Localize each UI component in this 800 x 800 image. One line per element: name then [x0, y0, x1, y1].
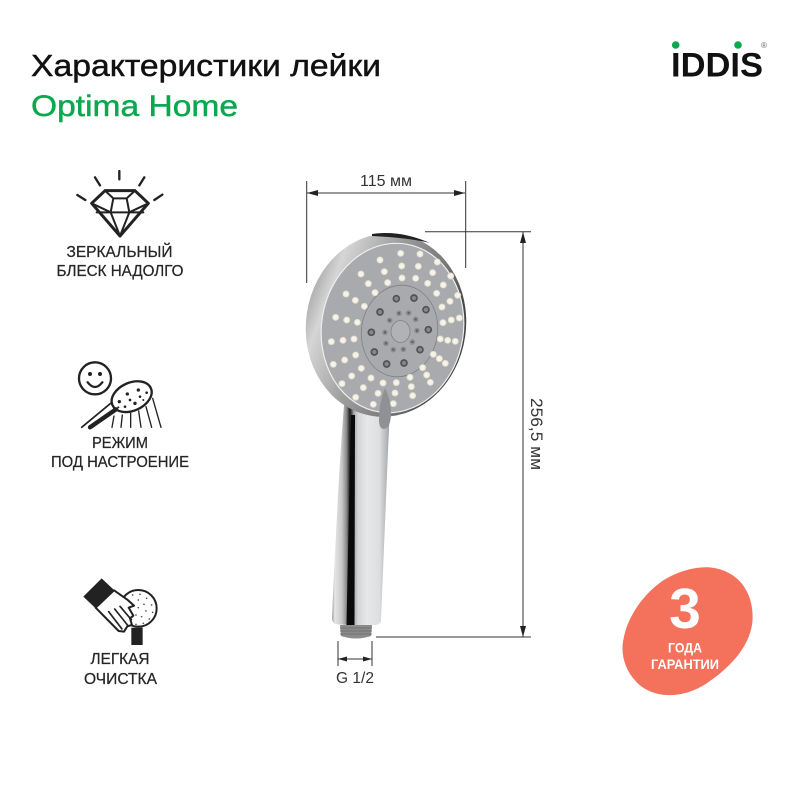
dimension: height 256.5 mm — [376, 232, 546, 637]
title: Характеристики лейки — [31, 49, 381, 83]
icon: smile and shower — [79, 362, 161, 427]
dimension: width 115 mm — [307, 173, 466, 283]
label: mirror shine: ЗЕРКАЛЬНЫЙ — [66, 243, 172, 261]
label: mirror shine: БЛЕСК НАДОЛГО — [56, 263, 184, 280]
warranty badge: 3 — [669, 577, 701, 641]
logo: IDDIS: ® — [761, 41, 767, 50]
dimension: G 1/2: G 1/2 — [336, 670, 374, 687]
nozzles — [328, 250, 463, 408]
warranty badge — [622, 567, 753, 695]
label: mood mode — [51, 435, 189, 471]
warranty badge: ГАРАНТИИ — [651, 656, 719, 672]
label: easy cleaning — [84, 651, 158, 688]
icon: diamond — [77, 171, 162, 236]
shower product — [294, 223, 478, 639]
mode lever — [379, 388, 391, 429]
label: easy cleaning: ЛЕГКАЯ — [90, 651, 150, 668]
dimension: height 256.5 mm: 256,5 мм — [527, 398, 546, 470]
logo: IDDIS: IDDIS — [671, 46, 763, 84]
label: mood mode: РЕЖИМ — [92, 435, 148, 452]
handle — [332, 405, 390, 638]
icon: hand cleaning shower — [83, 578, 157, 645]
cuff and hand — [83, 578, 134, 632]
subtitle: Optima Home — [31, 90, 238, 123]
shower head rim — [294, 223, 478, 427]
shower head face — [309, 233, 476, 423]
dimension: G 1/2 — [336, 641, 374, 687]
inner nozzle ring — [355, 280, 444, 382]
dimension: width 115 mm: 115 мм — [360, 173, 412, 190]
label: mirror shine — [56, 243, 184, 280]
label: easy cleaning: ОЧИСТКА — [84, 671, 158, 688]
warranty badge: ГОДА — [668, 640, 702, 656]
center button — [391, 320, 410, 342]
label: mood mode: ПОД НАСТРОЕНИЕ — [51, 454, 189, 471]
